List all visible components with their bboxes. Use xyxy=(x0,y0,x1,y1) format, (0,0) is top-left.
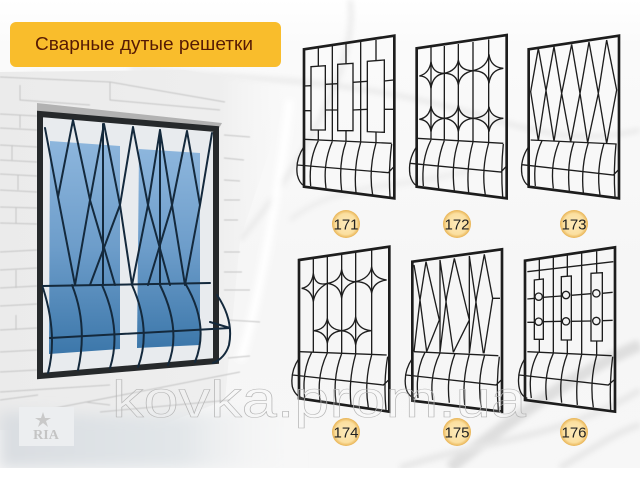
lintel shadow xyxy=(37,103,222,130)
grate 171 xyxy=(297,36,394,198)
badge 176 xyxy=(560,418,588,446)
bar lattice xyxy=(43,120,230,373)
window sash xyxy=(40,114,216,376)
badge 176: 176 xyxy=(561,424,587,442)
badge 171: 171 xyxy=(333,216,359,234)
grate 172 xyxy=(410,35,507,198)
right glass pane xyxy=(137,149,200,348)
grate 176 xyxy=(518,247,615,412)
badge 172: 172 xyxy=(444,216,470,234)
badge 174: 174 xyxy=(333,424,359,442)
logo text: RIA xyxy=(33,428,60,443)
badge 175 xyxy=(443,418,471,446)
left glass pane xyxy=(49,141,120,354)
photo window with bars xyxy=(37,103,230,376)
title text: Сварные дутые решетки xyxy=(35,34,253,54)
badge 171 xyxy=(332,210,360,238)
RIA logo xyxy=(19,407,74,446)
window frame xyxy=(40,114,216,376)
grate 175 xyxy=(405,249,502,412)
badge 172 xyxy=(443,210,471,238)
badge 173: 173 xyxy=(561,216,587,234)
badge 173 xyxy=(560,210,588,238)
badge 174 xyxy=(332,418,360,446)
title banner xyxy=(10,22,281,67)
watermark: kovka.prom.ua xyxy=(112,371,526,429)
grate 173 xyxy=(522,36,619,198)
grate 174 xyxy=(292,247,389,412)
badge 175: 175 xyxy=(444,424,470,442)
brick wall xyxy=(0,70,260,468)
star xyxy=(35,412,51,427)
